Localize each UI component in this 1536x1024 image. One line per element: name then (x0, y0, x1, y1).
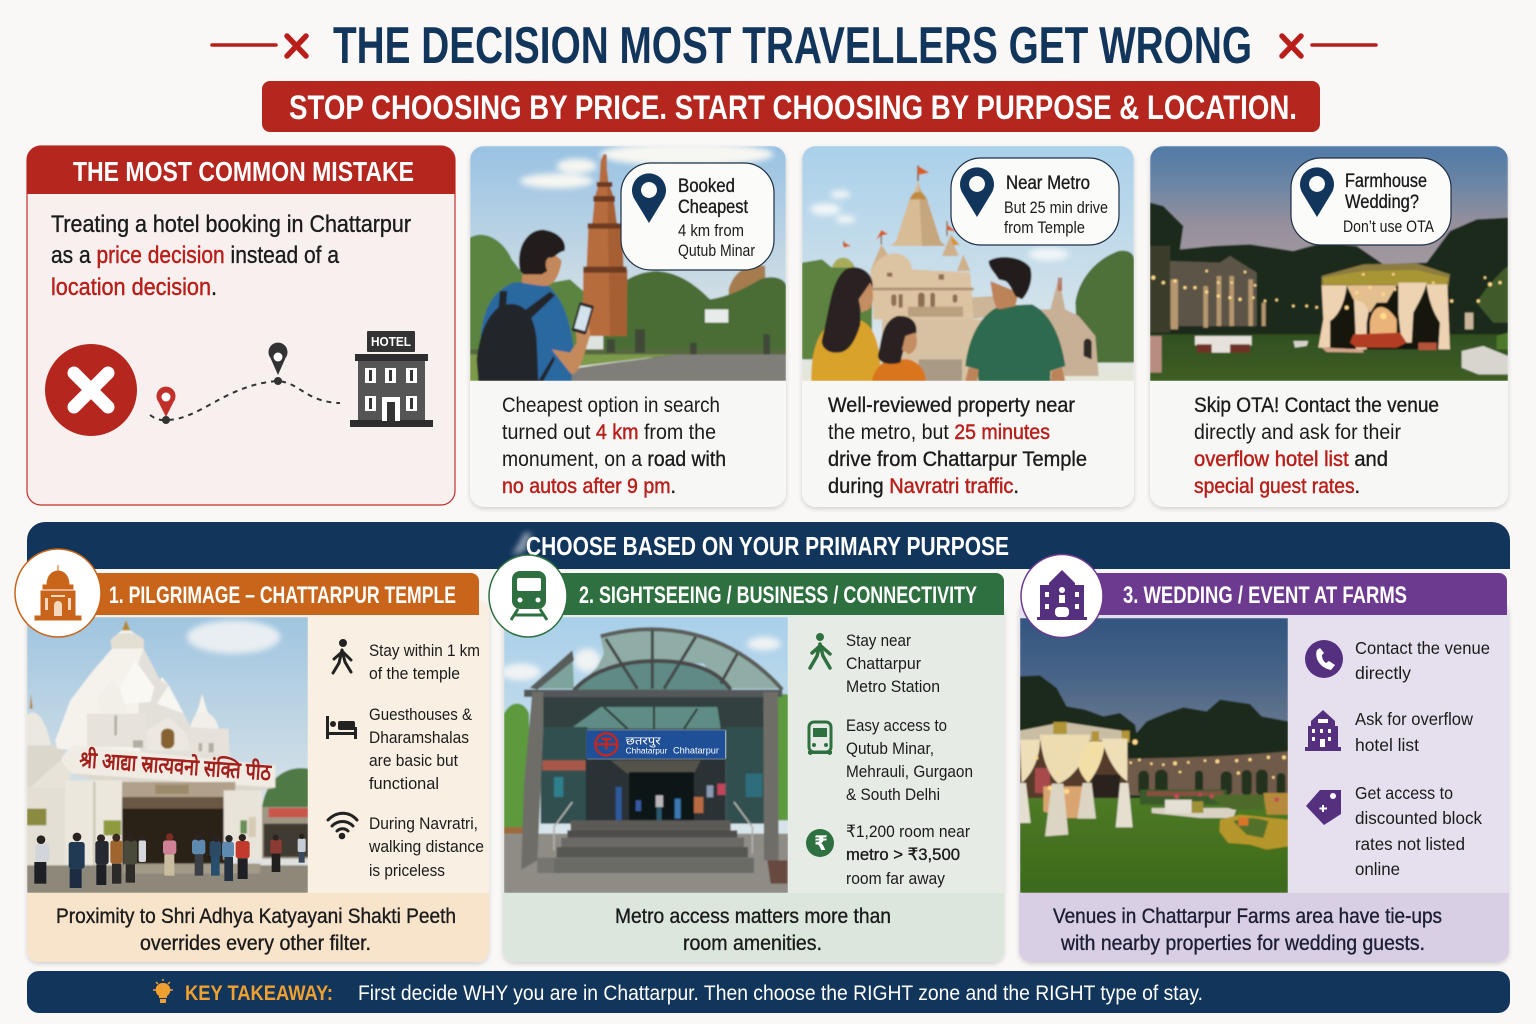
callout: booked cheapest: Qutub Minar (678, 241, 755, 260)
icon: hotel: HOTEL (371, 334, 411, 349)
list text 3: Get access to (1355, 783, 1453, 803)
footer note: Venues in Chattarpur Farms area have tie-ups (1053, 905, 1442, 928)
footer note: Metro access matters more than (615, 905, 891, 928)
mistake text (51, 211, 411, 301)
card text: the metro, but 25 minutes (828, 421, 1050, 444)
icon: venue badge (1021, 554, 1103, 638)
list text 2: Dharamshalas (369, 728, 469, 747)
callout: booked cheapest: 4 km from (678, 221, 744, 240)
key takeaway bar (27, 971, 1510, 1013)
list text 3: walking distance (368, 837, 484, 856)
list text 1: Stay near (846, 631, 911, 650)
icon: price tag (1306, 790, 1341, 825)
card text: Cheapest option in search (502, 394, 720, 417)
list background (788, 615, 1004, 893)
footer note: room amenities. (683, 932, 822, 955)
card text (828, 394, 1087, 498)
panel: farmhouse wedding (1150, 146, 1508, 507)
list text 1: Metro Station (846, 677, 940, 696)
icon: temple badge (15, 549, 101, 637)
panel: the most common mistake (27, 146, 455, 505)
metro sign: छतरपुर (626, 735, 661, 748)
card text: directly and ask for their (1194, 421, 1401, 444)
callout: near metro: from Temple (1004, 218, 1085, 237)
card text: during Navratri traffic. (828, 475, 1019, 498)
list text 3: rates not listed (1355, 834, 1465, 854)
mistake text: as a price decision instead of a (51, 242, 340, 269)
callout: booked cheapest: Cheapest (678, 197, 749, 218)
card text: overflow hotel list and (1194, 448, 1388, 471)
card text: turned out 4 km from the (502, 421, 716, 444)
list text 2: functional (369, 774, 439, 793)
metro sign: Chhatarpur (626, 746, 668, 756)
card text: special guest rates. (1194, 475, 1360, 498)
list text 2: Easy access to (846, 716, 947, 735)
list text 2 (1355, 709, 1473, 755)
icon: rupee (806, 829, 834, 857)
callout: near metro: Near Metro (1006, 173, 1090, 194)
list text 3: ₹1,200 room near (846, 822, 970, 841)
list text 2: Qutub Minar, (846, 739, 934, 758)
heading bar (555, 573, 1004, 615)
list text 2: are basic but (369, 751, 458, 770)
metro sign (586, 730, 725, 759)
list text 1: directly (1355, 663, 1411, 683)
list text 2: & South Delhi (846, 785, 940, 804)
icon: right cross and line (1282, 36, 1376, 56)
list text 3: room far away (846, 869, 945, 888)
illustration: farmhouse wedding at dusk (1150, 146, 1508, 381)
card text: Skip OTA! Contact the venue (1194, 394, 1439, 417)
card text (1194, 394, 1439, 498)
footer note (1019, 893, 1509, 962)
panel: pilgrimage (15, 549, 489, 962)
photo: wedding venue at dusk (1020, 618, 1288, 893)
list text 3: is priceless (369, 861, 445, 880)
panel heading (27, 146, 455, 194)
card text: monument, on a road with (502, 448, 726, 471)
list text 1: Stay within 1 km (369, 641, 480, 660)
callout: farmhouse wedding: Farmhouse (1345, 171, 1427, 192)
list text 3: online (1355, 859, 1400, 879)
icon: left line and cross (212, 36, 306, 56)
icon: hotel (350, 331, 433, 427)
callout: booked cheapest: Booked (678, 176, 735, 197)
subtitle banner (262, 81, 1320, 132)
icon: train badge (489, 555, 567, 637)
card text: no autos after 9 pm. (502, 475, 676, 498)
icon: rupee: ₹ (814, 833, 828, 855)
panel heading: THE MOST COMMON MISTAKE (73, 156, 414, 187)
icon: light bulb (153, 979, 173, 1003)
heading bar: 1. PILGRIMAGE – CHATTARPUR TEMPLE (109, 582, 456, 609)
family figures (811, 321, 881, 381)
list text 1 (846, 631, 940, 696)
footer note (503, 893, 1004, 962)
subtitle banner: STOP CHOOSING BY PRICE. START CHOOSING BY PURPOSE & LOCATION. (289, 89, 1297, 127)
list text 3 (846, 822, 970, 888)
list text 2: Mehrauli, Gurgaon (846, 762, 973, 781)
photo: temple gate (27, 617, 308, 893)
list text 3: During Navratri, (369, 814, 478, 833)
heading bar (1095, 573, 1507, 615)
callout: farmhouse wedding: Wedding? (1345, 192, 1419, 213)
takeaway text: First decide WHY you are in Chattarpur. Then choose the RIGHT zone and the RIGHT type of stay. (358, 982, 1203, 1005)
icon: location pin (1300, 167, 1334, 217)
list text 2 (369, 705, 473, 793)
heading bar: 2. SIGHTSEEING / BUSINESS / CONNECTIVITY (579, 582, 977, 609)
panel: wedding (1019, 554, 1509, 962)
icon: train (808, 722, 832, 754)
icon: red cross circle (45, 344, 137, 436)
list text 1 (369, 641, 480, 683)
list background (308, 615, 489, 893)
icon: walking person (333, 640, 351, 673)
callout: farmhouse wedding (1291, 158, 1451, 245)
callout: farmhouse wedding: Don’t use OTA (1343, 217, 1435, 236)
list text 1 (1355, 638, 1490, 683)
mistake text: location decision. (51, 274, 217, 301)
list text 1: of the temple (369, 664, 460, 683)
callout: near metro (951, 158, 1119, 245)
icon: bed (326, 716, 357, 739)
list text 3: discounted block (1355, 808, 1482, 828)
takeaway label: KEY TAKEAWAY: (185, 982, 333, 1005)
list text 2: Guesthouses & (369, 705, 473, 724)
icon: location pin (960, 167, 994, 217)
footer note: Proximity to Shri Adhya Katyayani Shakti Peeth (56, 905, 456, 928)
list text 3 (1355, 783, 1482, 879)
section heading band (27, 522, 1510, 569)
photo: metro station (501, 617, 788, 893)
icon: route with pins (150, 343, 340, 424)
list text 1: Contact the venue (1355, 638, 1490, 658)
heading bar (90, 573, 479, 615)
icon: wifi (328, 813, 357, 838)
footer note: overrides every other filter. (140, 932, 371, 955)
footer note: with nearby properties for wedding guests. (1060, 932, 1425, 955)
list text 1: Chattarpur (846, 654, 921, 673)
mistake text: Treating a hotel booking in Chattarpur (51, 211, 411, 238)
heading text: THE DECISION MOST TRAVELLERS GET WRONG (333, 17, 1252, 75)
card text (502, 394, 726, 498)
panel: sightseeing (489, 555, 1004, 962)
icon: phone (1305, 640, 1343, 678)
list text 2: hotel list (1355, 735, 1419, 755)
callout: booked cheapest (621, 163, 774, 270)
list text 3: metro > ₹3,500 (846, 845, 960, 864)
list text 2: Ask for overflow (1355, 709, 1473, 729)
visitors (34, 833, 306, 888)
callout: near metro: But 25 min drive (1004, 198, 1108, 217)
footer note (27, 893, 489, 962)
card text: Well-reviewed property near (828, 394, 1075, 417)
icon: location pin (632, 173, 666, 223)
card text: drive from Chattarpur Temple (828, 448, 1087, 471)
illustration: traveller at Qutub Minar (470, 143, 786, 381)
panel: booked cheapest (470, 143, 786, 507)
metro sign: Chhatarpur (673, 746, 719, 756)
list background (1288, 615, 1509, 893)
person with backpack (477, 230, 594, 381)
icon: hotel (1305, 710, 1341, 751)
section heading band: CHOOSE BASED ON YOUR PRIMARY PURPOSE (526, 531, 1009, 561)
title (212, 17, 1376, 75)
panel: near metro (802, 146, 1134, 507)
list text 3 (368, 814, 484, 880)
list text 2 (846, 716, 973, 804)
illustration: family at temple (802, 146, 1134, 381)
icon: walking person green (810, 634, 830, 668)
heading bar: 3. WEDDING / EVENT AT FARMS (1123, 582, 1407, 609)
temple sign: श्री आद्या स्रात्यवनो संक्ति पीठ (79, 745, 273, 785)
